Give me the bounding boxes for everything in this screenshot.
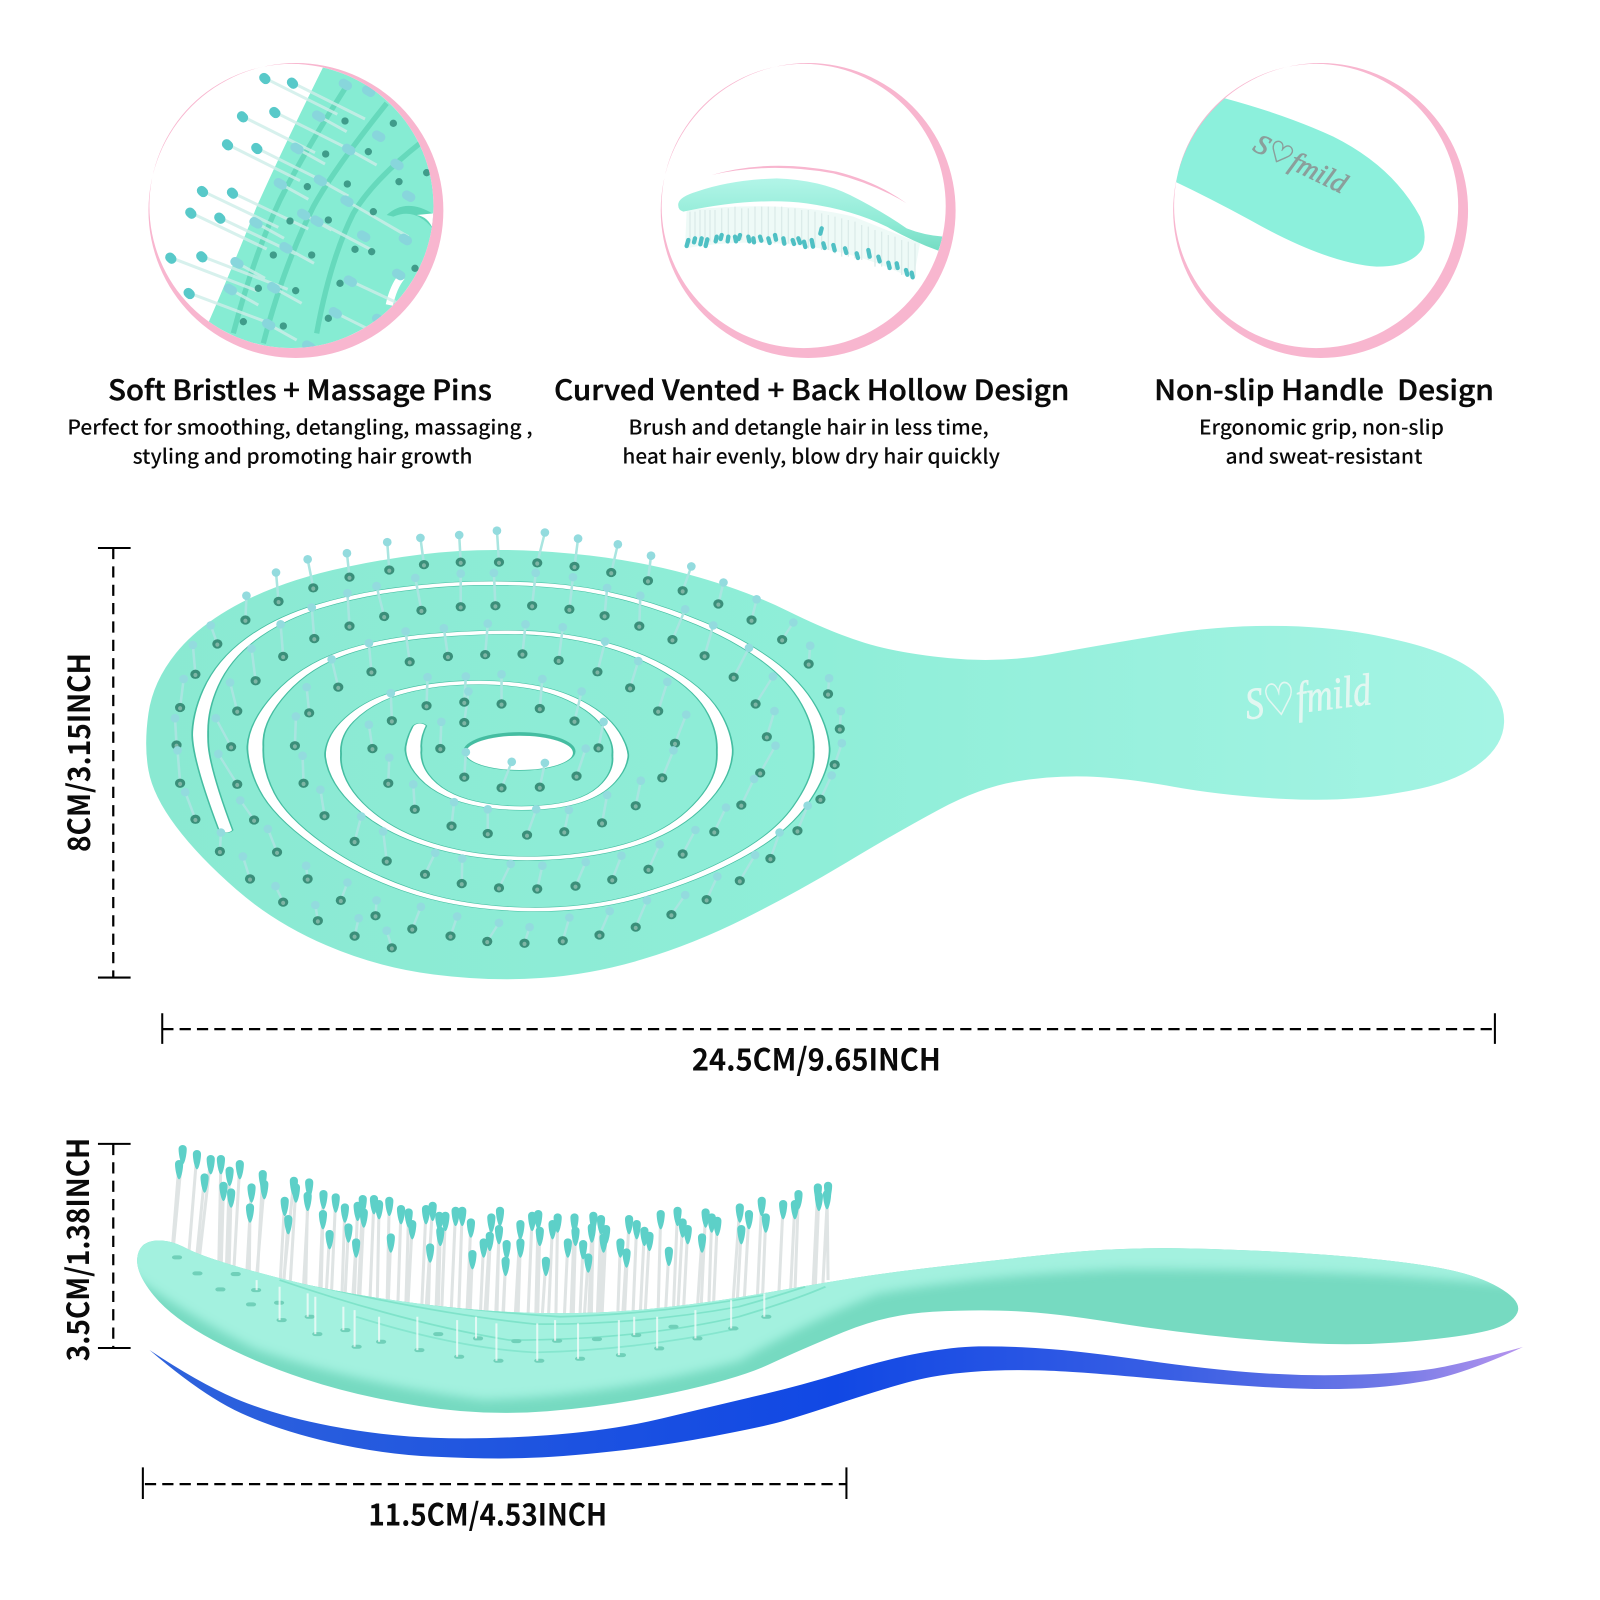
panel: non-slip handle bbox=[1150, 63, 1494, 469]
logo: S♡fmild bbox=[1242, 664, 1374, 729]
dimension: brush width bbox=[54, 548, 131, 978]
spiral vents and pins bbox=[175, 531, 842, 948]
description: heat hair evenly, blow dry hair quickly bbox=[622, 439, 1000, 469]
dimension: brush height: 3.5CM/1.38INCH bbox=[53, 1138, 98, 1361]
dimension: head length: 11.5CM/4.53INCH bbox=[368, 1490, 607, 1535]
description: Ergonomic grip, non-slip bbox=[1199, 411, 1444, 441]
bristles bbox=[171, 1148, 828, 1360]
ring: pink crescent bbox=[1173, 63, 1468, 358]
description: Brush and detangle hair in less time, bbox=[629, 411, 989, 441]
panel: curved vented bbox=[554, 63, 1069, 469]
icon: handle close-up: S♡fmild bbox=[1249, 128, 1353, 201]
ring: pink crescent bbox=[148, 63, 443, 358]
pin tips and front stems bbox=[179, 1145, 828, 1361]
dimension: brush length: 24.5CM/9.65INCH bbox=[692, 1034, 941, 1079]
heading: Curved Vented + Back Hollow Design bbox=[554, 368, 1069, 408]
heading: Non-slip Handle Design bbox=[1154, 368, 1494, 408]
panel: soft bristles bbox=[67, 53, 533, 469]
body bbox=[137, 1240, 1518, 1413]
dimension: brush width: 8CM/3.15INCH bbox=[54, 653, 99, 852]
dimension: head length bbox=[143, 1467, 846, 1535]
brush: top view bbox=[146, 531, 1504, 979]
description: styling and promoting hair growth bbox=[133, 439, 472, 469]
icon: curved brush profile bbox=[678, 166, 943, 279]
brush body bbox=[146, 550, 1504, 979]
icon: handle close-up bbox=[1176, 98, 1425, 267]
ring: pink crescent bbox=[661, 63, 956, 358]
brush: side view bbox=[112, 1145, 1541, 1413]
dimension: brush length bbox=[162, 1013, 1495, 1079]
description: Perfect for smoothing, detangling, massaging , bbox=[67, 411, 533, 441]
dimension: brush height bbox=[53, 1138, 131, 1361]
blue curve under side view bbox=[149, 1346, 1523, 1458]
icon: bristle close-up bbox=[165, 68, 434, 348]
description: and sweat-resistant bbox=[1226, 439, 1422, 469]
body shading bbox=[137, 1240, 1500, 1404]
heading: Soft Bristles + Massage Pins bbox=[108, 368, 492, 408]
